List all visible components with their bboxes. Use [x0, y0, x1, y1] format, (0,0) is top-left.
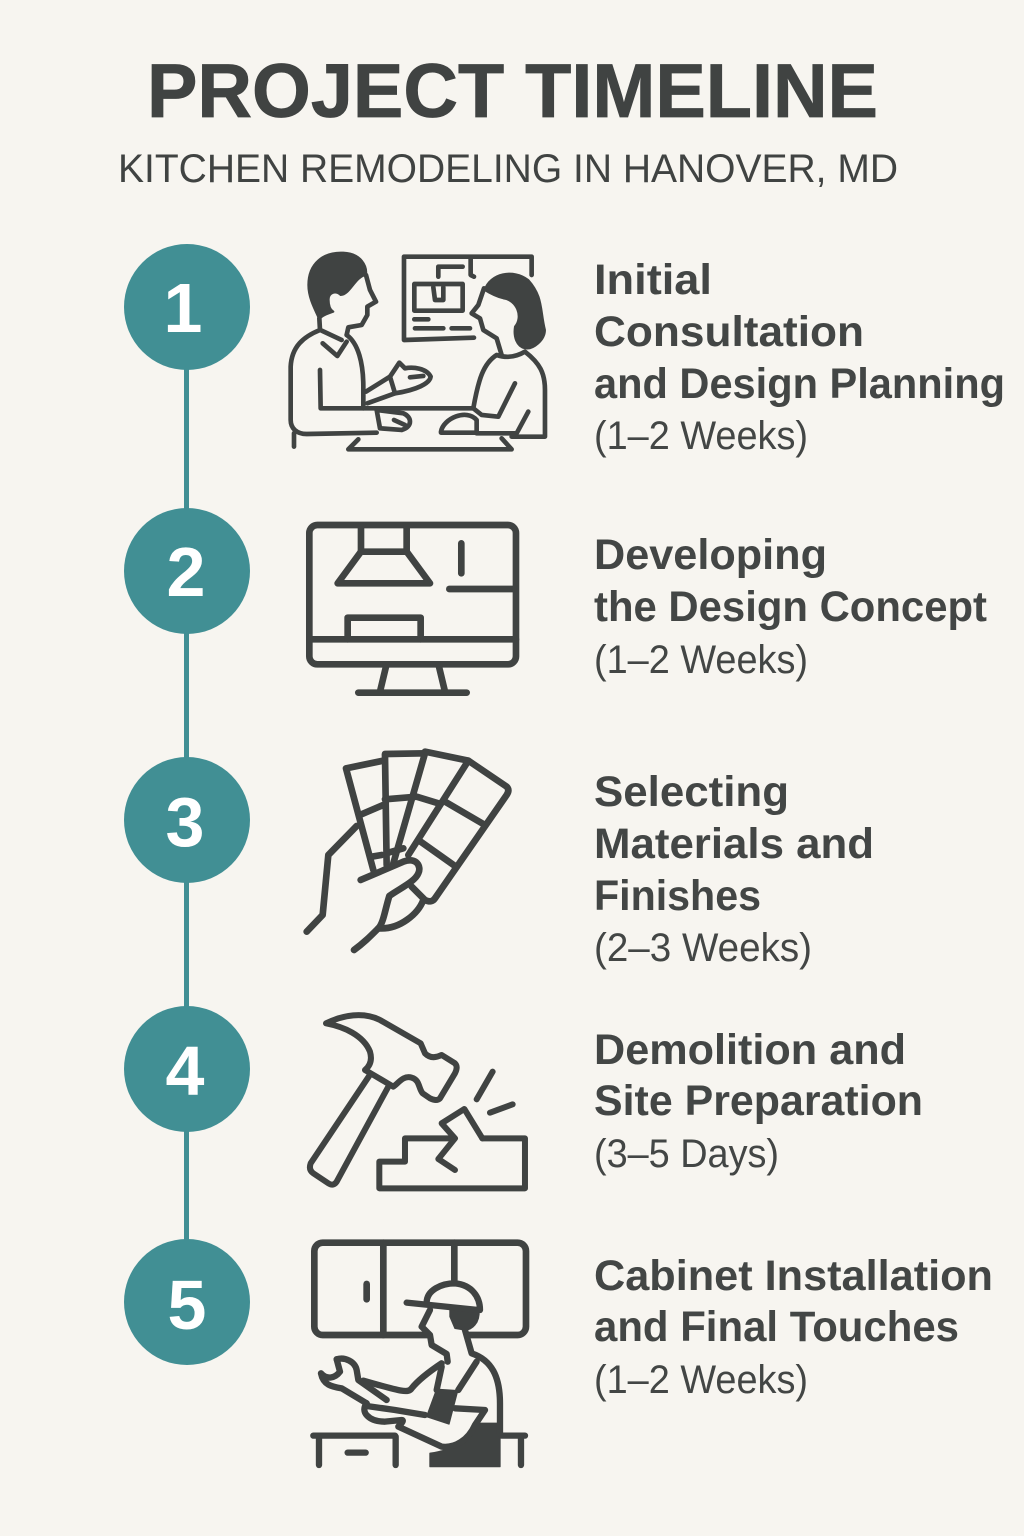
step 4 text: (3–5 Days): [594, 1132, 779, 1176]
step 1 text: (1–2 Weeks): [594, 414, 808, 458]
step 3 text: [594, 768, 874, 970]
step 1 text: and Design Planning: [594, 360, 1005, 408]
icon: hammer breaking material: [310, 1015, 525, 1188]
step 3 number badge: [124, 757, 250, 883]
step 4 text: [594, 1026, 923, 1176]
title: PROJECT TIMELINE: [147, 49, 878, 134]
step 3 text: (2–3 Weeks): [594, 926, 812, 970]
step 2 text: the Design Concept: [594, 583, 987, 631]
step 2 text: Developing: [594, 531, 827, 579]
step 5 number badge: 5: [168, 1266, 206, 1344]
step 5 number badge: [124, 1239, 250, 1365]
timeline connector line: [184, 307, 189, 1302]
step 2 text: [594, 531, 987, 682]
step 4 number badge: [124, 1006, 250, 1132]
step 1 text: Consultation: [594, 308, 864, 356]
step 3 text: Selecting: [594, 768, 789, 816]
step 5 text: Cabinet Installation: [594, 1252, 993, 1300]
step 1 text: Initial: [594, 256, 712, 304]
step 5 text: and Final Touches: [594, 1303, 959, 1351]
icon: worker installing cabinets with wrench: [313, 1243, 526, 1467]
icon: hand holding fan of material swatches: [307, 752, 508, 950]
subtitle: KITCHEN REMODELING IN HANOVER, MD: [118, 147, 898, 191]
step 4 text: Demolition and: [594, 1026, 906, 1074]
step 1 number badge: [124, 244, 250, 370]
step 2 text: (1–2 Weeks): [594, 638, 808, 682]
step 4 text: Site Preparation: [594, 1077, 923, 1125]
icon: consultation between two people: [291, 253, 545, 449]
step 3 number badge: 3: [166, 783, 204, 861]
step 2 number badge: 2: [167, 533, 205, 611]
step 1 number badge: 1: [164, 269, 202, 347]
step 5 text: (1–2 Weeks): [594, 1358, 808, 1402]
step 3 text: Finishes: [594, 872, 761, 920]
icon: computer monitor showing kitchen design: [309, 525, 516, 693]
step 1 text: [594, 256, 1005, 458]
step 4 number badge: 4: [166, 1032, 205, 1110]
step 5 text: [594, 1252, 993, 1402]
step 2 number badge: [124, 508, 250, 634]
step 3 text: Materials and: [594, 820, 874, 868]
